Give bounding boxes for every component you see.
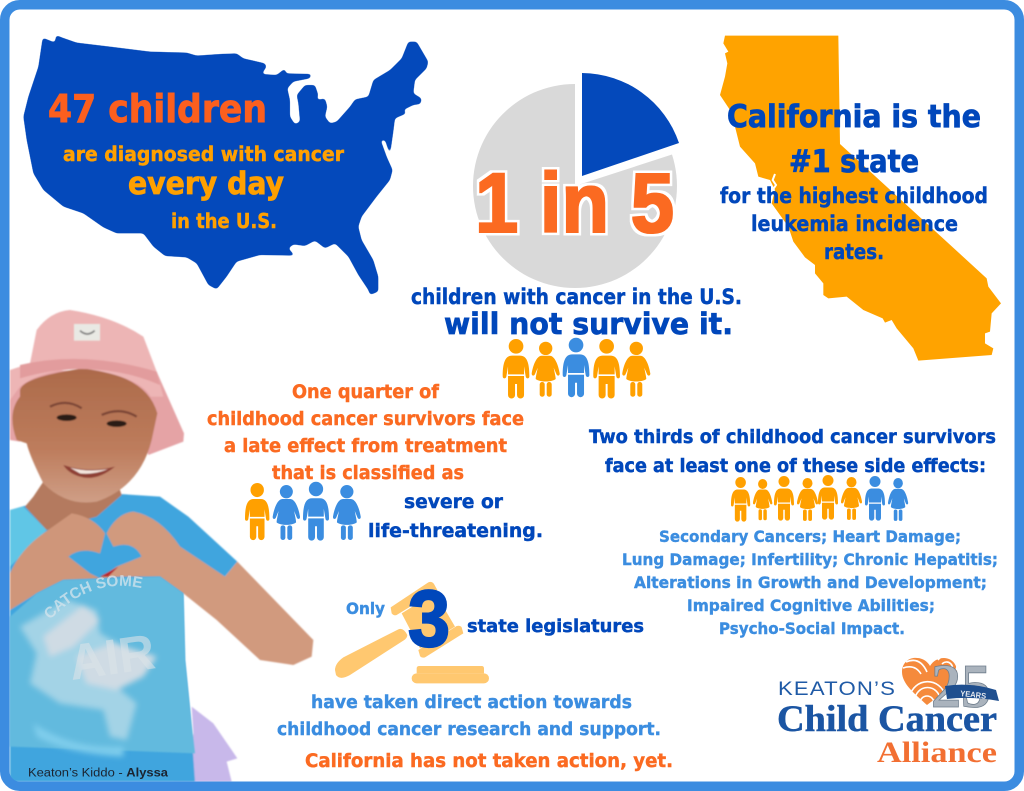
icon row: five children — [503, 338, 650, 398]
text: Only: Only — [346, 599, 386, 618]
text: have taken direct action towards: have taken direct action towards — [311, 692, 632, 713]
text: a late effect from treatment: a late effect from treatment — [224, 435, 507, 457]
text: are diagnosed with cancer: are diagnosed with cancer — [63, 142, 344, 166]
photo sub-element: hat crown — [10, 310, 163, 400]
panel: one quarter of survivors — [207, 381, 543, 542]
photo sub-element: shirt graphic: AIR — [65, 623, 158, 691]
icon row: eight children — [731, 475, 908, 522]
text: California has not taken action, yet: California has not taken action, yet. — [305, 750, 673, 772]
icon: US map — [23, 35, 428, 295]
text: rates: rates. — [824, 240, 884, 264]
heading: California is the: California is the — [727, 99, 981, 135]
panel: two thirds of survivors — [589, 426, 998, 638]
text: childhood cancer survivors face: childhood cancer survivors face — [207, 408, 524, 430]
photo sub-element: face — [12, 368, 157, 503]
panel: California statistic — [720, 36, 1001, 361]
text: side effects list: Lung Damage; Infertility; Chronic Hepatitis; — [622, 550, 998, 569]
logo: Keaton's Child Cancer Alliance — [777, 653, 999, 769]
text: children with cancer in the U.S.: children with cancer in the U.S. — [411, 285, 742, 309]
text: side effects list: Alterations in Growth and Development; — [634, 573, 987, 592]
text: in the U.S.: in the U.S. — [171, 209, 277, 233]
photo caption: Keaton’s Kiddo - Alyssa — [28, 766, 168, 780]
logo sub-element: years banner — [945, 685, 999, 701]
icon: California map — [720, 36, 1001, 361]
text: leukemia incidence: leukemia incidence — [751, 212, 958, 236]
icon: gavel — [335, 582, 489, 683]
photo sub-element: shirt graphic: CATCH SOME — [44, 575, 143, 618]
logo sub-element: Child Cancer: Child Cancer — [777, 699, 997, 740]
panel: state legislatures — [277, 574, 673, 772]
text: severe or: severe or — [404, 491, 504, 513]
photo sub-element: smile — [63, 465, 115, 478]
text: side effects list: Impaired Cognitive Abilities; — [687, 596, 935, 615]
logo sub-element: Alliance: Alliance — [877, 736, 997, 769]
text: side effects list: Secondary Cancers; Heart Damage; — [659, 527, 961, 546]
text: face at least one of these side effects: face at least one of these side effects: — [605, 455, 986, 477]
text: for the highest childhood: for the highest childhood — [720, 184, 988, 208]
text: life-threatening: life-threatening. — [368, 520, 543, 542]
text: side effects list — [622, 527, 998, 638]
panel: US map statistic — [23, 35, 428, 295]
text: will not survive it: will not survive it. — [444, 307, 733, 341]
heading: 47 children: 47 children — [48, 87, 267, 131]
photo: Alyssa with hands in a heart shape — [10, 309, 314, 782]
photo sub-element: eyes — [57, 414, 77, 421]
photo sub-element: neck — [25, 467, 122, 530]
stat: 1 in 5: 1 in 5 — [475, 156, 674, 250]
photo sub-element: shirt graphic — [10, 575, 196, 760]
text: every day: every day — [128, 166, 284, 202]
photo sub-element: shirt — [10, 494, 237, 782]
text: One quarter of: One quarter of — [292, 381, 440, 403]
stat: 3: 3 — [408, 574, 450, 663]
icon row: four children — [245, 482, 361, 541]
pie slice: one fifth — [582, 73, 679, 176]
text: Two thirds of childhood cancer survivors: Two thirds of childhood cancer survivors — [589, 426, 996, 448]
panel: 1 in 5 pie chart — [411, 73, 742, 398]
photo sub-element: shirt light panel — [10, 507, 47, 567]
logo sub-element: years banner: YEARS — [960, 689, 987, 701]
text: childhood cancer research and support: childhood cancer research and support. — [277, 719, 661, 740]
text: side effects list: Psycho-Social Impact. — [719, 619, 905, 638]
photo sub-element: skirt — [173, 707, 237, 782]
photo sub-element: arms and hands — [10, 513, 105, 610]
photo sub-element: hat brim rear — [10, 370, 184, 455]
heading: #1 state: #1 state — [789, 144, 919, 180]
pie slice: remaining share — [473, 84, 677, 288]
logo sub-element: 25 numeral: 25 — [931, 653, 991, 721]
logo sub-element: Keaton's: KEATON’S — [778, 679, 896, 700]
text: state legislatures: state legislatures — [467, 616, 644, 637]
text: that is classified as: that is classified as — [272, 462, 464, 484]
logo sub-element: heart — [902, 656, 957, 705]
